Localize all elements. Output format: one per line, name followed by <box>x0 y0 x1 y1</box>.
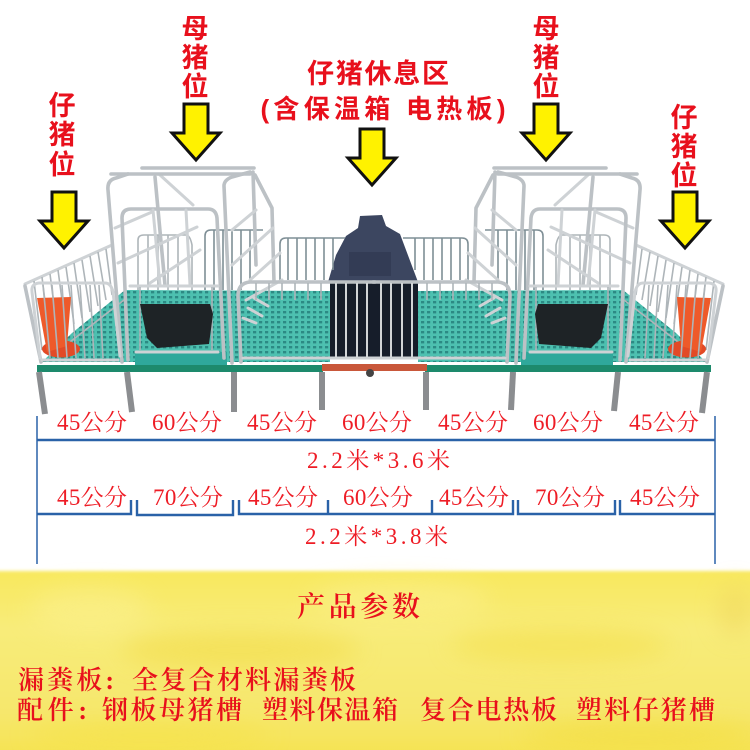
label: piglet position right <box>670 103 698 191</box>
arrow: sow right <box>522 104 570 160</box>
base strip <box>37 364 711 377</box>
label: piglet position right: 猪 <box>670 132 698 162</box>
label: sow position right <box>532 14 560 102</box>
label: sow position right: 猪 <box>532 43 560 73</box>
row: 3.6 m segments: 45公分 <box>629 410 699 435</box>
arrow: rest area <box>348 129 396 185</box>
row: 3.6 m segments <box>57 410 699 435</box>
heading: product parameters: 产品参数 <box>297 591 420 623</box>
row: 3.6 m segments: 45公分 <box>57 410 127 435</box>
text: accessories <box>17 696 715 725</box>
arrow: piglet left <box>40 192 88 248</box>
label: piglet rest area: 仔猪休息区 <box>307 59 449 89</box>
label: piglet position left: 位 <box>48 149 76 180</box>
label: piglet position left <box>48 91 76 180</box>
arrow: sow left <box>172 104 220 160</box>
row: 3.6 m segments: 45公分 <box>438 410 508 435</box>
back fence <box>138 230 345 290</box>
arrow: piglet right <box>661 192 709 248</box>
row: 3.8 m segments: 70公分 <box>153 485 223 510</box>
label: sow position left <box>182 14 208 102</box>
feeder <box>37 297 80 358</box>
row: 3.6 m segments: 60公分 <box>342 410 412 435</box>
text: accessories: 塑料保温箱 <box>262 696 398 725</box>
label: sow position left: 猪 <box>182 43 208 73</box>
front rail <box>238 282 375 362</box>
label: piglet position left: 仔 <box>48 91 76 121</box>
legs <box>39 372 707 414</box>
text: accessories: 塑料仔猪槽 <box>576 696 715 725</box>
sow frame <box>108 168 274 363</box>
row: 3.6 m segments: 60公分 <box>533 410 603 435</box>
total: 3.8 m: 2.2米*3.8米 <box>305 524 448 549</box>
row: 3.8 m segments: 70公分 <box>535 485 605 510</box>
row: 3.8 m segments: 45公分 <box>57 485 127 510</box>
gate <box>122 209 224 360</box>
text: accessories: 钢板母猪槽 <box>102 696 242 725</box>
row: 3.8 m segments: 45公分 <box>248 485 318 510</box>
row: 3.6 m segments: 45公分 <box>247 410 317 435</box>
side rails <box>115 210 282 323</box>
trough <box>140 304 213 348</box>
dimension chart <box>37 410 715 564</box>
side fence <box>25 245 124 350</box>
left half cage <box>25 168 375 363</box>
label: piglet position right: 仔 <box>670 103 698 133</box>
label: piglet position left: 猪 <box>48 120 76 150</box>
text: accessories: 复合电热板 <box>420 696 557 725</box>
panel: product parameters <box>0 571 750 750</box>
front gate left <box>25 283 120 362</box>
label: piglet rest area: (含保温箱 电热板) <box>260 94 506 124</box>
text: accessories: 配件: <box>17 696 87 725</box>
row: 3.8 m segments: 60公分 <box>343 485 413 510</box>
text: slat material: 全复合材料漏粪板 <box>132 666 356 695</box>
total: 3.6 m: 2.2米*3.6米 <box>307 448 450 473</box>
right half cage <box>373 168 723 363</box>
row: 3.8 m segments: 45公分 <box>630 485 700 510</box>
label: sow position right: 母 <box>532 14 560 44</box>
label: sow position left: 位 <box>182 71 208 102</box>
label: piglet rest area <box>260 59 506 124</box>
text: slat material: 漏粪板: <box>18 666 114 695</box>
label: piglet position right: 位 <box>670 160 698 191</box>
label: sow position right: 位 <box>532 71 560 102</box>
row: 3.8 m segments <box>57 485 700 510</box>
text: slat material <box>18 666 356 695</box>
illustration: farrowing crate <box>25 168 723 414</box>
row: 3.6 m segments: 60公分 <box>152 410 222 435</box>
dimension lines <box>37 416 715 564</box>
label: sow position left: 母 <box>182 14 208 44</box>
row: 3.8 m segments: 45公分 <box>439 485 509 510</box>
heating box: hood <box>328 215 418 358</box>
floor slats <box>42 290 706 365</box>
